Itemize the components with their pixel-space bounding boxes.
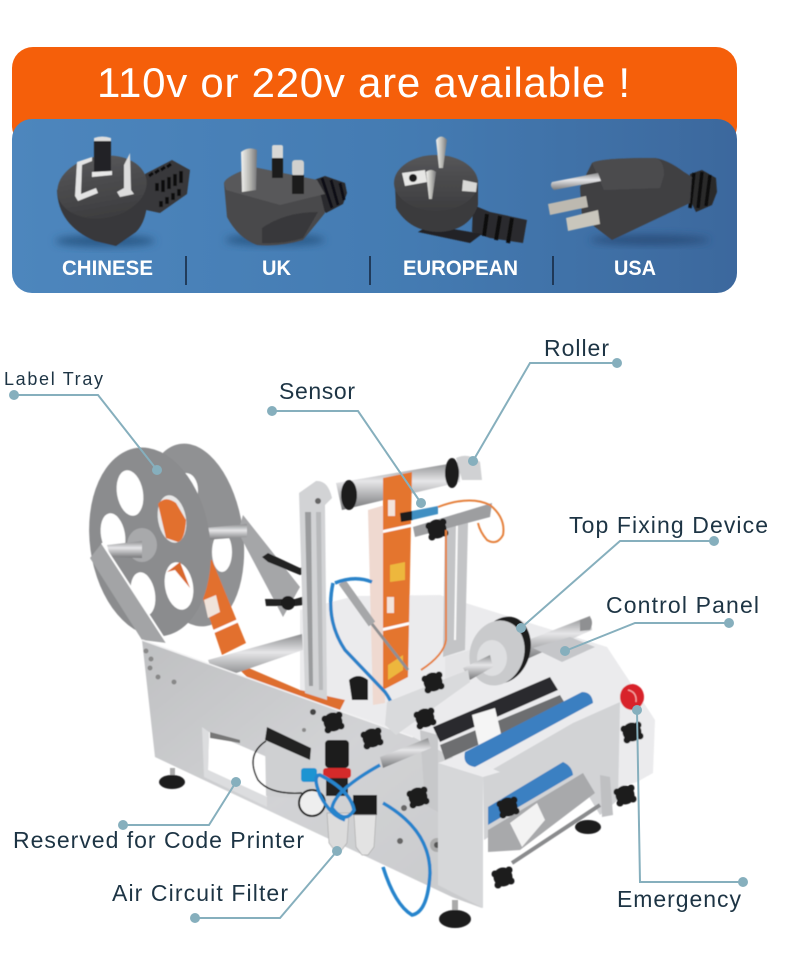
label: CHINESE: CHINESE [62, 257, 153, 280]
black star knobs [322, 672, 644, 888]
rear reel shaft [205, 524, 247, 540]
callout: Top Fixing Device [516, 512, 768, 633]
spindle wheel [461, 610, 592, 693]
machine: round bottle labelling machine [77, 437, 655, 928]
orange header band [12, 47, 737, 147]
front reel shaft [107, 541, 142, 558]
orange cable [421, 500, 503, 670]
label: UK: UK [262, 257, 291, 280]
callout: Sensor: Sensor [279, 378, 355, 404]
callout: Label Tray [4, 369, 162, 475]
callout: Control Panel [560, 592, 759, 656]
sensor [400, 506, 438, 522]
label strip from reel [190, 560, 246, 655]
reel support strut [238, 515, 300, 617]
applicator arm [385, 670, 470, 735]
roller bay back plate [483, 702, 620, 840]
top roller [336, 456, 482, 510]
callout: Sensor [267, 378, 426, 508]
roller bay bracket [600, 775, 613, 817]
front side plate [142, 640, 482, 908]
white and orange label strip [368, 472, 412, 705]
icon: Chinese plug [52, 136, 190, 247]
column and sensor arm [413, 503, 492, 680]
grey lower roller [488, 773, 595, 852]
callout: Reserved for Code Printer: Reserved for Code Printer [13, 827, 304, 853]
callout: Emergency: Emergency [617, 886, 742, 912]
callout: Reserved for Code Printer [13, 777, 304, 853]
white machine casing [300, 595, 655, 790]
emergency stop button [620, 684, 644, 710]
callout: Label Tray: Label Tray [4, 369, 103, 389]
panel: voltage and plug types [12, 47, 737, 293]
reel bracket [90, 543, 167, 643]
callout: Roller [468, 335, 622, 466]
callout: Emergency [617, 705, 748, 912]
dark opening in casing [349, 676, 368, 700]
white label band [510, 803, 545, 847]
label: EUROPEAN: EUROPEAN [403, 257, 518, 280]
icon: USA plug [548, 158, 717, 245]
dark upper roller [433, 677, 558, 742]
blue plug panel [12, 119, 737, 293]
steel bar near post [380, 738, 431, 768]
air filter regulator unit [299, 740, 377, 855]
back reel disc [131, 437, 255, 633]
icon: European plug [394, 136, 527, 243]
label strip under rod [230, 660, 345, 710]
blue lower roller [488, 762, 573, 825]
front reel disc [77, 440, 223, 644]
blue air tube upper [331, 579, 396, 730]
lower horizontal rod [208, 634, 303, 680]
vertical post [299, 481, 332, 700]
title: 110v or 220v are available ! [97, 59, 630, 106]
steel rod [512, 805, 600, 863]
blue air tubes lower [316, 765, 430, 915]
clamp handles [262, 553, 313, 610]
rectangular post at plate end [420, 730, 438, 812]
digital pressure switch and cable [253, 727, 316, 800]
feet [159, 768, 601, 928]
right end plate [438, 763, 483, 908]
control panel plate [533, 637, 595, 662]
label: USA: USA [614, 257, 656, 280]
callout: Air Circuit Filter [112, 846, 342, 923]
callout: Control Panel: Control Panel [606, 592, 759, 618]
pneumatic cylinder [342, 582, 408, 670]
blue upper roller [464, 692, 593, 767]
callout: Top Fixing Device: Top Fixing Device [569, 512, 768, 538]
callout: Roller: Roller [544, 335, 609, 361]
white label patch [472, 708, 502, 752]
icon: UK plug [224, 145, 347, 246]
callout: Air Circuit Filter: Air Circuit Filter [112, 880, 288, 906]
